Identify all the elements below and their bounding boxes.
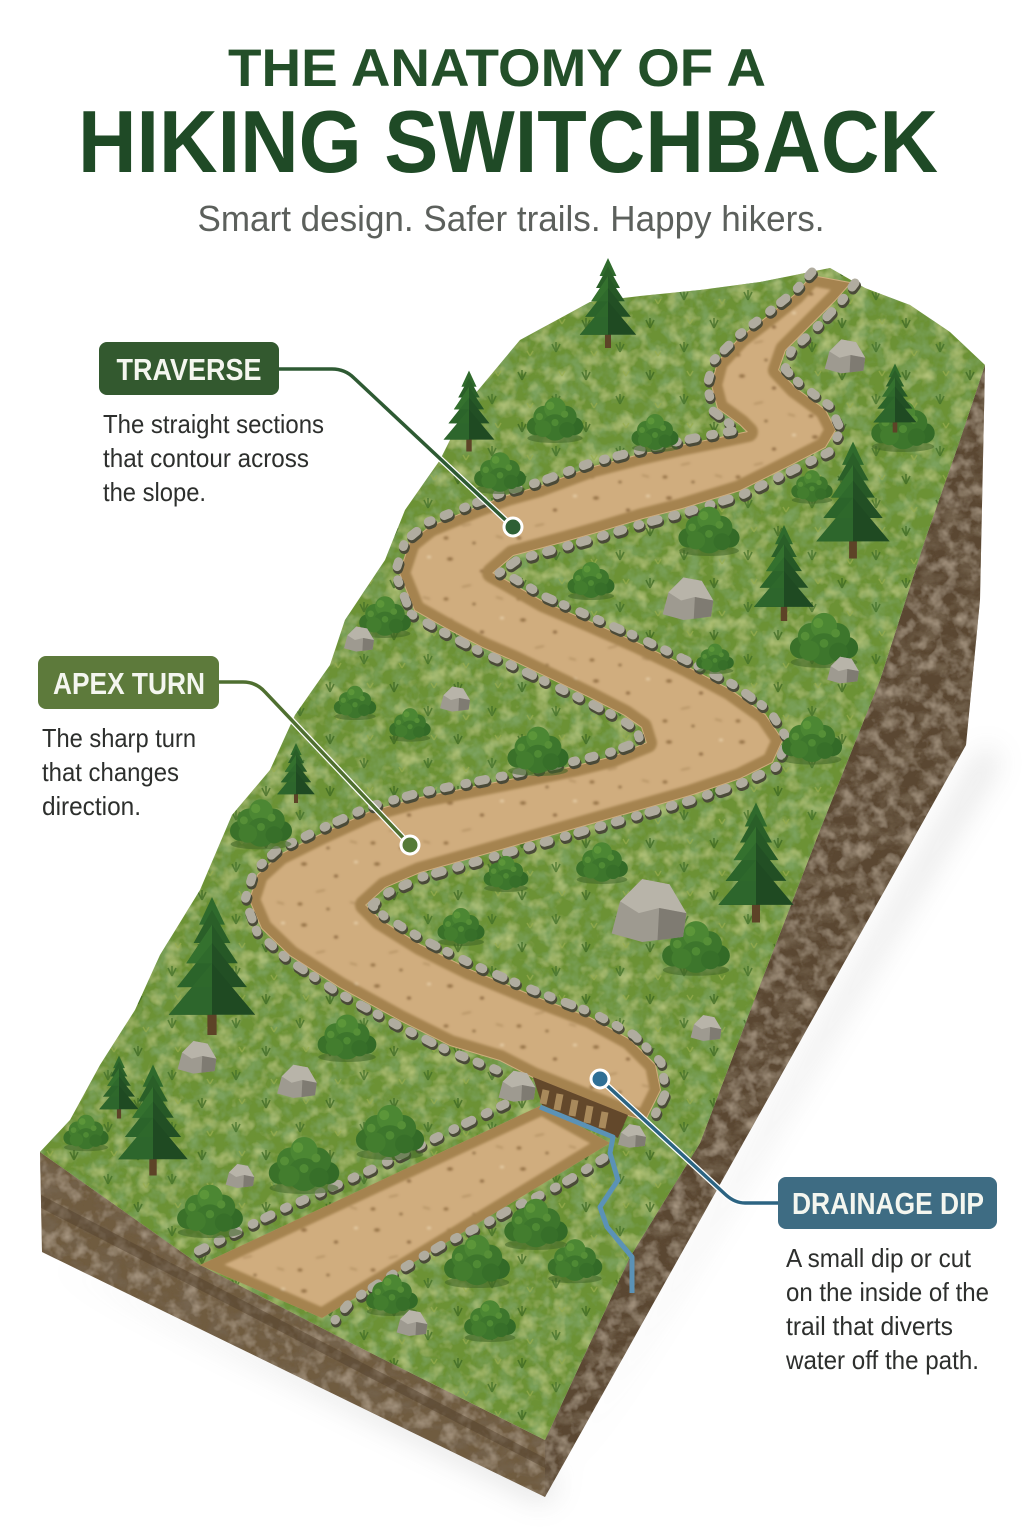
grass tufts <box>40 268 985 1440</box>
drainage description: trail that diverts <box>786 1311 953 1341</box>
drainage description: on the inside of the <box>786 1277 989 1307</box>
stones <box>198 272 855 1320</box>
apex marker <box>401 836 419 854</box>
traverse label <box>99 342 279 395</box>
vegetation <box>63 258 935 1342</box>
stone shadows <box>199 274 856 1322</box>
apex label text: APEX TURN <box>53 666 205 701</box>
traverse leader line <box>279 369 513 527</box>
drainage label text: DRAINAGE DIP <box>792 1186 984 1221</box>
lower trail rim <box>200 1105 610 1318</box>
drainage dip cut <box>533 1077 628 1138</box>
ground shadow <box>50 745 1000 1505</box>
terrain block <box>40 268 1000 1505</box>
trail <box>198 272 856 1322</box>
subtitle: Smart design. Safer trails. Happy hikers. <box>198 198 824 239</box>
upper trail rim <box>250 276 850 1120</box>
callout: drainage dip <box>591 1070 997 1375</box>
traverse description: The straight sections <box>103 409 324 439</box>
callout: apex turn <box>38 656 419 854</box>
rocks <box>178 339 865 1336</box>
dip stones right <box>618 1124 646 1148</box>
dip stonework <box>543 1090 605 1128</box>
dip stones left <box>499 1071 535 1102</box>
drainage description: water off the path. <box>785 1345 979 1375</box>
drainage leader line <box>600 1079 778 1203</box>
traverse leader halo <box>279 369 513 527</box>
apex description: that changes <box>42 757 179 787</box>
traverse description: the slope. <box>103 477 206 507</box>
title <box>78 39 938 191</box>
pine trees <box>99 258 917 1176</box>
upper trail surface <box>250 276 850 1120</box>
callout: traverse <box>99 342 522 536</box>
apex label <box>38 656 219 709</box>
apex leader line <box>219 682 410 845</box>
drainage leader halo <box>600 1079 778 1203</box>
bushes <box>63 397 935 1342</box>
right cliff wall <box>545 365 985 1497</box>
traverse marker <box>504 518 522 536</box>
title line: the anatomy of a: THE ANATOMY OF A <box>228 39 766 98</box>
apex description: direction. <box>42 791 141 821</box>
title line: hiking switchback: HIKING SWITCHBACK <box>78 92 938 191</box>
drainage description: A small dip or cut <box>786 1243 972 1273</box>
drainage label <box>778 1177 997 1229</box>
traverse description: that contour across <box>103 443 309 473</box>
grass surface <box>40 268 985 1440</box>
apex leader halo <box>219 682 410 845</box>
apex description: The sharp turn <box>42 723 196 753</box>
stream <box>540 1107 632 1293</box>
drainage marker <box>591 1070 609 1088</box>
traverse label text: TRAVERSE <box>116 352 262 387</box>
soil band <box>41 1195 545 1468</box>
lower trail surface <box>200 1105 610 1318</box>
front soil wall <box>40 1152 545 1497</box>
stone borders <box>198 272 856 1322</box>
